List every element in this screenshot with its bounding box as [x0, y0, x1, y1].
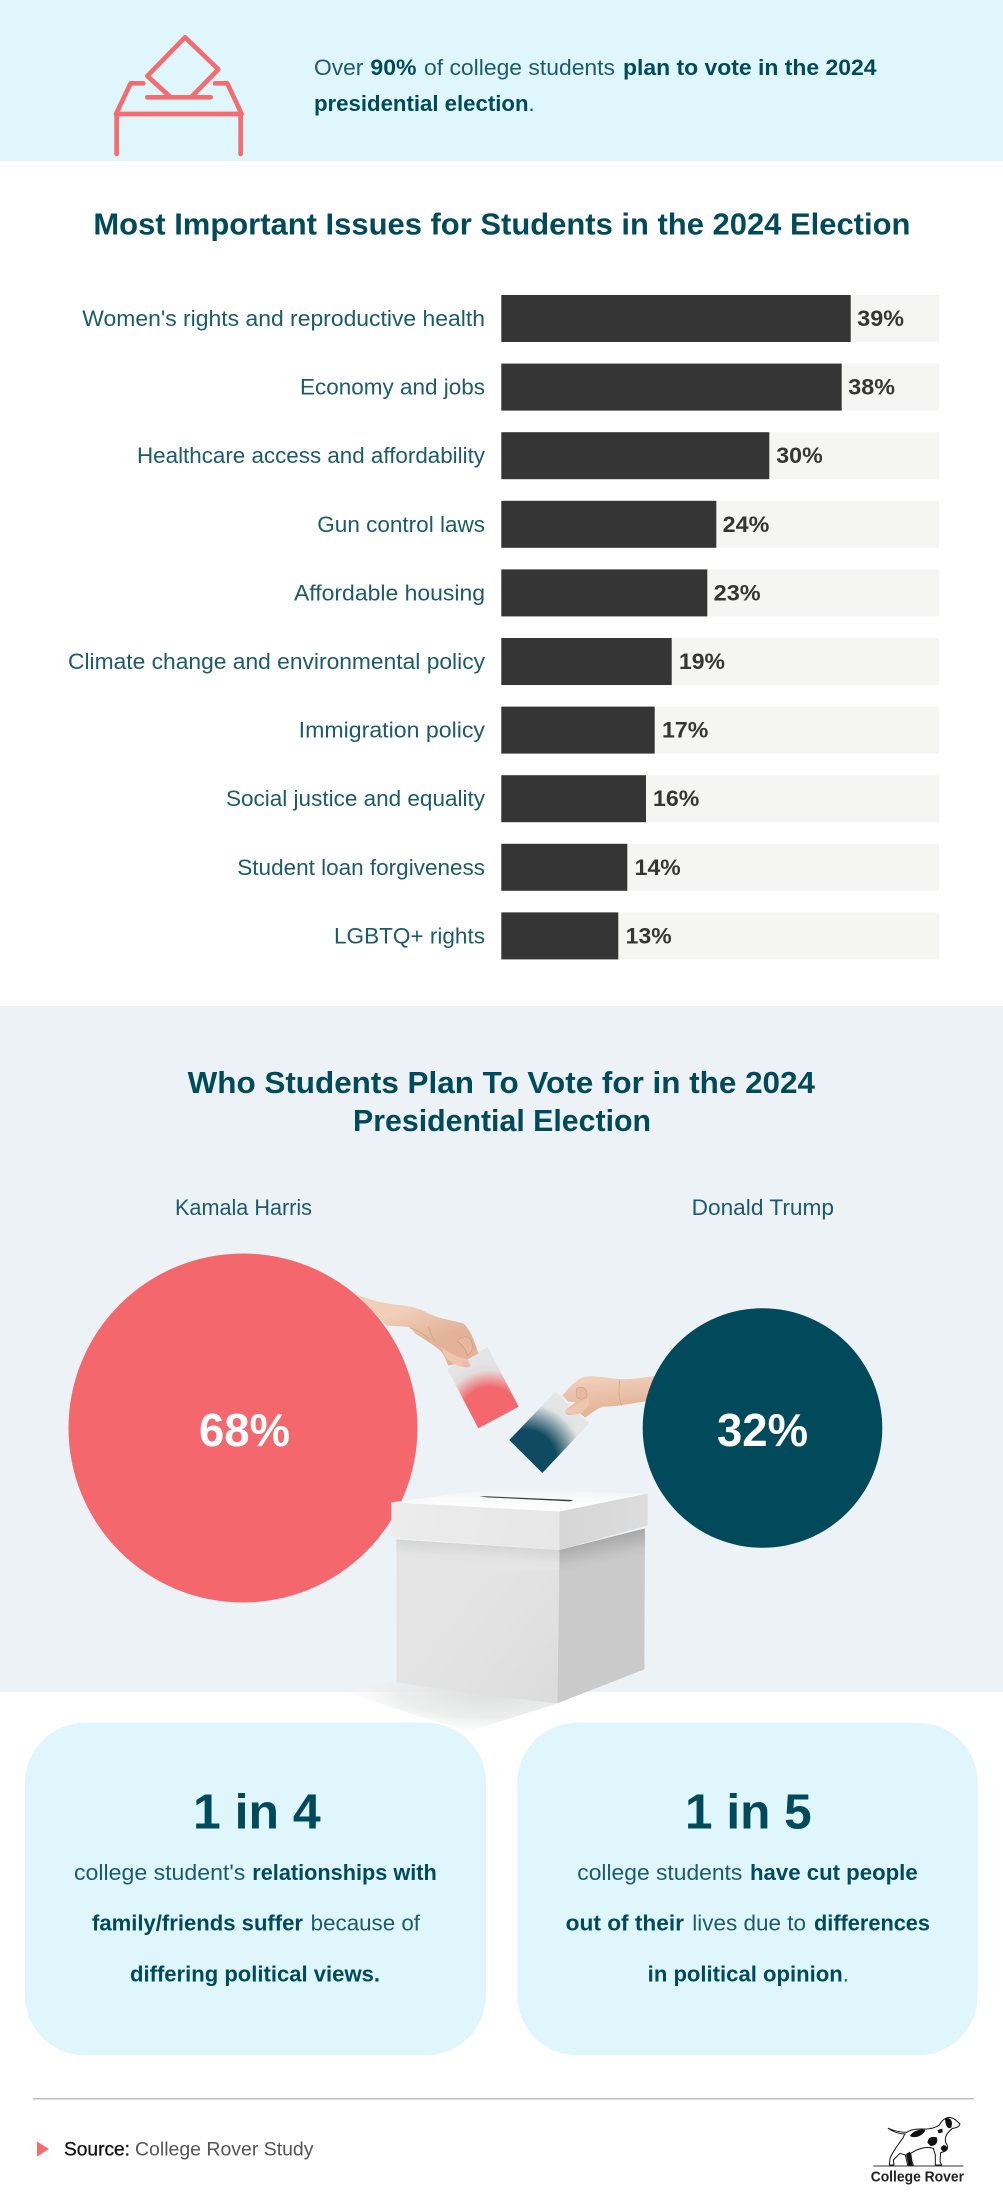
row: women's rights 39%: 39% [857, 306, 904, 331]
row: gun control 24%: Gun control laws [317, 512, 485, 537]
row: lgbtq 13%: LGBTQ+ rights [334, 923, 485, 948]
card: 1 in 5: have cut people [750, 1860, 918, 1885]
heading: who students plan to vote for: Who Students Plan To Vote for in the 2024 [188, 1065, 816, 1100]
hand: left [357, 1294, 478, 1368]
row: climate 19% [68, 638, 939, 685]
card: 1 in 5 [517, 1723, 978, 2055]
row: economy 38% [300, 364, 939, 411]
ballot: pink [447, 1347, 519, 1428]
row: student loans 14%: Student loan forgiveness [237, 855, 485, 880]
banner text: plan to vote in the 2024 [623, 55, 877, 80]
row: healthcare 30% [137, 432, 939, 479]
card: 1 in 5: college students [577, 1860, 742, 1885]
card: 1 in 4: family/friends suffer [92, 1911, 303, 1936]
source text: Source: [64, 2140, 130, 2161]
row: women's rights 39% [82, 295, 939, 342]
lid right [559, 1494, 648, 1550]
row: gun control 24% [317, 501, 939, 548]
illustration: ballot box [391, 1489, 648, 1703]
circle: Trump share: 32% [717, 1404, 808, 1456]
source text [64, 2140, 314, 2161]
banner text: presidential election [314, 91, 528, 116]
circle: Harris share [68, 1254, 418, 1602]
row: healthcare 30%: Healthcare access and affordability [137, 443, 485, 468]
row: student loans 14% [237, 844, 939, 891]
heading: who students plan to vote for: Presidential Election [353, 1103, 651, 1138]
circle: Harris share: 68% [199, 1404, 290, 1456]
ballot slot [479, 1496, 573, 1501]
circle: Trump share [643, 1308, 882, 1548]
logo: College Rover [871, 2117, 964, 2186]
banner text: of college students [424, 55, 615, 80]
row: housing 23%: Affordable housing [294, 580, 485, 605]
bar chart: issues [68, 295, 939, 959]
banner text: . [528, 91, 535, 116]
row: immigration 17%: 17% [662, 718, 708, 743]
card: 1 in 4: college student's [74, 1860, 245, 1885]
lid front [391, 1502, 559, 1550]
row: economy 38%: Economy and jobs [300, 375, 485, 400]
row: immigration 17% [299, 707, 939, 754]
card: 1 in 5: lives due to [692, 1911, 806, 1936]
row: lgbtq 13%: 13% [626, 923, 672, 948]
card: 1 in 5: in political opinion [648, 1962, 843, 1987]
card: 1 in 4: because of [311, 1911, 421, 1936]
box right face [557, 1528, 645, 1703]
box ground shadow [330, 1682, 557, 1732]
row: housing 23% [294, 569, 939, 616]
label: Kamala Harris: Kamala Harris [175, 1195, 312, 1220]
row: student loans 14%: 14% [635, 855, 681, 880]
ballot: navy [510, 1392, 588, 1472]
row: housing 23%: 23% [714, 580, 761, 605]
card: 1 in 4: 1 in 4 [193, 1786, 321, 1840]
footer [33, 2099, 974, 2186]
lid top [391, 1489, 648, 1512]
row: lgbtq 13% [334, 912, 939, 959]
card: 1 in 4: relationships with [252, 1860, 437, 1885]
illustration: right hand with navy ballot [510, 1376, 655, 1472]
source text: College Rover Study [135, 2140, 314, 2161]
hand: right [562, 1376, 655, 1418]
heading: most important issues: Most Important Issues for Students in the 2024 Election [93, 206, 910, 241]
card: 1 in 5: 1 in 5 [685, 1786, 812, 1840]
label: Donald Trump: Donald Trump [692, 1195, 834, 1220]
row: social justice 16% [226, 775, 939, 822]
logo: College Rover: College Rover [871, 2169, 964, 2186]
card: 1 in 5: out of their [566, 1911, 684, 1936]
icon: source arrow [37, 2142, 49, 2157]
banner text: Over [314, 55, 363, 80]
row: economy 38%: 38% [848, 375, 895, 400]
card: 1 in 5: differences [814, 1911, 930, 1936]
row: women's rights 39%: Women's rights and reproductive health [82, 306, 485, 331]
panel: voting intention background [0, 1006, 1003, 1692]
row: gun control 24%: 24% [723, 512, 769, 537]
row: healthcare 30%: 30% [776, 443, 823, 468]
banner text: 90% [370, 55, 416, 80]
row: social justice 16%: 16% [653, 786, 699, 811]
icon: ballot box [116, 37, 242, 154]
row: climate 19%: 19% [679, 649, 725, 674]
illustration: left hand with pink ballot [357, 1294, 519, 1428]
row: climate 19%: Climate change and environmental policy [68, 649, 485, 674]
card: 1 in 5: . [843, 1962, 849, 1987]
card: 1 in 4 [25, 1723, 486, 2055]
card: 1 in 4: differing political views. [130, 1962, 380, 1987]
row: immigration 17%: Immigration policy [299, 718, 485, 743]
row: social justice 16%: Social justice and equality [226, 786, 485, 811]
banner text [314, 55, 877, 116]
box front face [396, 1539, 559, 1703]
heading: who students plan to vote for [188, 1065, 816, 1138]
top banner [0, 0, 1003, 161]
